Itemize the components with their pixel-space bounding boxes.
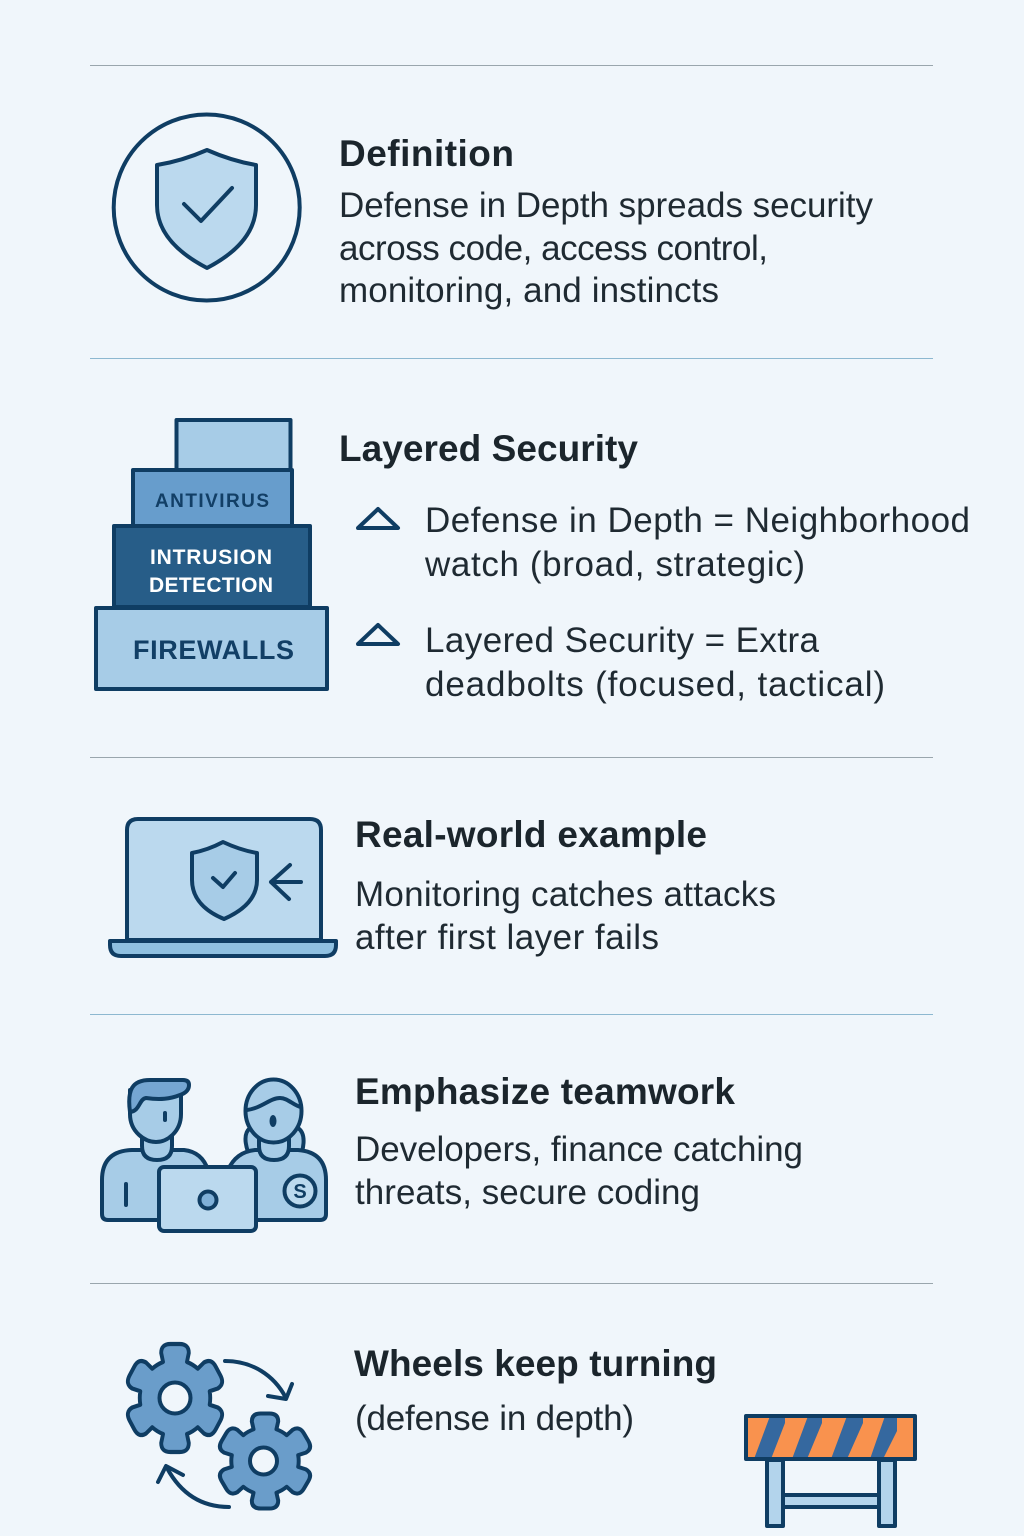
gear: large	[128, 1344, 222, 1452]
layer: firewalls	[96, 608, 327, 689]
panel: definition	[114, 114, 873, 310]
text: teamwork body: Developers, finance catching	[355, 1130, 803, 1169]
gear: small	[220, 1413, 310, 1509]
icon: triangle bullet 1	[358, 509, 398, 528]
layer: firewalls: FIREWALLS	[133, 635, 294, 665]
barricade board	[746, 1416, 915, 1459]
icon: layered stack	[96, 420, 327, 689]
layer: antivirus: ANTIVIRUS	[155, 491, 269, 512]
text: bullet 1: Defense in Depth = Neighborhood	[425, 501, 970, 540]
laptop: shared	[159, 1167, 256, 1231]
icon: gears with cycle arrows	[128, 1344, 310, 1509]
heading: definition: Definition	[339, 133, 514, 174]
heading: real-world example: Real-world example	[355, 814, 707, 855]
text: bullet 2	[425, 621, 885, 704]
panel: teamwork	[102, 1071, 803, 1231]
text: bullet 1	[424, 501, 970, 584]
barricade legs	[767, 1460, 895, 1526]
text: definition body: monitoring, and instincts	[339, 271, 719, 310]
person: developer	[102, 1080, 208, 1220]
layer: intrusion detection: DETECTION	[149, 574, 273, 597]
layer: antivirus	[133, 470, 292, 526]
layer: intrusion detection: INTRUSION	[150, 546, 272, 569]
heading: emphasize teamwork: Emphasize teamwork	[355, 1071, 735, 1112]
arrow: clockwise top	[225, 1361, 292, 1399]
text: definition body: across code, access control,	[339, 229, 768, 268]
icon: two people with laptop	[102, 1080, 326, 1231]
panel: layered security	[96, 420, 970, 704]
text: real-world body: after first layer fails	[355, 918, 659, 957]
text: real-world body	[355, 875, 776, 957]
text: teamwork body	[355, 1130, 803, 1212]
text: bullet 1: watch (broad, strategic)	[424, 545, 805, 584]
layer: intrusion detection	[114, 526, 310, 607]
icon: road barricade	[746, 1416, 915, 1526]
person: finance	[228, 1080, 326, 1220]
panel: wheels keep turning	[128, 1343, 915, 1526]
icon: triangle bullet 2	[358, 625, 398, 644]
icon: laptop with shield	[110, 819, 336, 956]
text: definition body: Defense in Depth spreads security	[339, 186, 874, 225]
person: finance: S	[293, 1181, 307, 1203]
text: real-world body: Monitoring catches attacks	[355, 875, 776, 914]
text: wheels body: (defense in depth)	[355, 1399, 634, 1438]
icon: shield with check in circle	[114, 114, 300, 300]
heading: wheels keep turning: Wheels keep turning	[354, 1343, 717, 1384]
arrow: clockwise bottom	[158, 1466, 229, 1507]
text: teamwork body: threats, secure coding	[355, 1173, 700, 1212]
text: bullet 2: Layered Security = Extra	[425, 621, 820, 660]
text: definition body	[339, 186, 874, 310]
text: bullet 2: deadbolts (focused, tactical)	[425, 665, 885, 704]
layer: top block	[176, 420, 290, 470]
panel: real-world example	[110, 814, 776, 957]
heading: layered security: Layered Security	[339, 428, 638, 469]
